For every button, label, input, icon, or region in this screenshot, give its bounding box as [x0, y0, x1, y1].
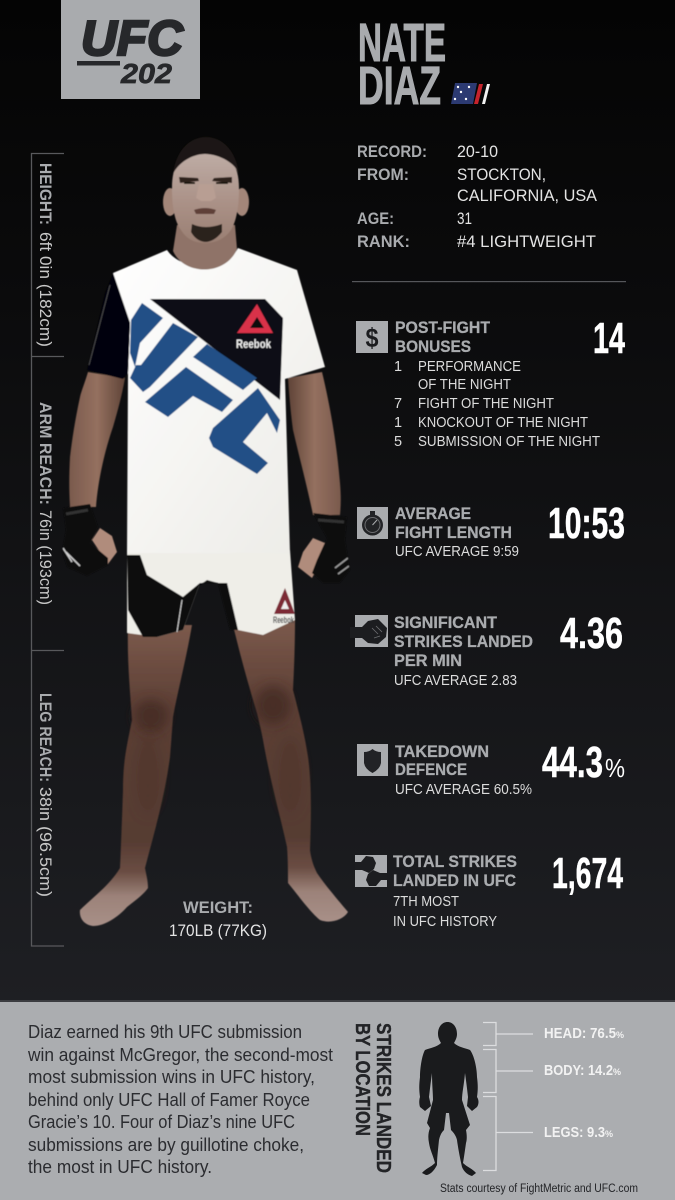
body brackets [483, 1022, 533, 1170]
heading: strikes landed by location: STRIKES LANDED [372, 1023, 394, 1173]
logo: UFC 202: UFC [81, 12, 184, 66]
icon: two fists [355, 855, 387, 887]
panel: post-fight bonuses: PERFORMANCE [418, 359, 521, 375]
fighter details: CALIFORNIA, USA [457, 186, 598, 205]
panel: post-fight bonuses: 7 [394, 396, 402, 412]
fighter details: RECORD: [357, 142, 427, 161]
leg reach label: LEG REACH: [36, 693, 55, 782]
shirt [87, 248, 325, 553]
panel: total strikes [355, 849, 623, 930]
fighter details: STOCKTON, [457, 165, 546, 184]
panel: total strikes: IN UFC HISTORY [393, 914, 497, 930]
label: legs: % [605, 1129, 613, 1139]
panel: significant strikes: 4.36 [560, 609, 623, 658]
panel: total strikes: 7TH MOST [393, 894, 459, 910]
icon: body silhouette [419, 1022, 478, 1176]
panel: average fight length: 10:53 [548, 499, 625, 548]
reebok chest logo: Reebok [236, 339, 272, 351]
panel: post-fight bonuses: FIGHT OF THE NIGHT [418, 396, 554, 412]
fighter details: 31 [457, 209, 472, 228]
text block: submission note: Diaz earned his 9th UFC submission [28, 1022, 302, 1042]
logo: UFC 202: 202 [120, 58, 172, 89]
leg reach label: 38in (96.5cm) [36, 787, 55, 897]
head [163, 137, 249, 270]
panel: takedown defence: DEFENCE [395, 760, 467, 779]
arms [69, 372, 341, 515]
panel: takedown defence: TAKEDOWN [395, 742, 489, 761]
fighter details: RANK: [357, 232, 410, 251]
panel: post-fight bonuses: BONUSES [395, 337, 471, 356]
text block: submission note: the most in UFC history. [28, 1157, 212, 1177]
black left sleeve [87, 273, 130, 379]
label: head: % [616, 1030, 624, 1040]
fighter details: 20-10 [457, 142, 498, 161]
fighter details: #4 LIGHTWEIGHT [457, 232, 596, 251]
panel: average fight length: FIGHT LENGTH [395, 523, 512, 542]
panel: average fight length [357, 499, 625, 560]
panel: post-fight bonuses: 14 [593, 314, 625, 363]
panel: average fight length: AVERAGE [395, 504, 471, 523]
panel: post-fight bonuses: OF THE NIGHT [418, 377, 511, 393]
arm reach label [36, 402, 55, 605]
fighter figure [62, 137, 350, 926]
panel: post-fight bonuses: SUBMISSION OF THE NIGHT [418, 434, 600, 450]
arm reach label: ARM REACH: [36, 402, 55, 505]
shorts: Reebok [273, 615, 295, 625]
icon: shield [357, 744, 388, 776]
panel: takedown defence: 44.3 [542, 738, 603, 787]
icon: dollar [356, 321, 388, 353]
icon: flag [451, 83, 490, 104]
source credit: Stats courtesy of FightMetric and UFC.com [440, 1183, 638, 1195]
icon: dollar: $ [366, 323, 378, 353]
panel: post-fight bonuses: 1 [394, 415, 402, 431]
panel: significant strikes: SIGNIFICANT [394, 613, 498, 632]
text block: submission note: behind only UFC Hall of Famer Royce [28, 1090, 310, 1110]
text block: submission note [27, 1022, 333, 1177]
text block: submission note: Gracie’s 10. Four of Diaz’s nine UFC [28, 1112, 295, 1132]
panel: takedown defence [357, 738, 625, 798]
fighter details [357, 142, 598, 251]
panel: significant strikes: UFC AVERAGE 2.83 [394, 673, 517, 689]
label: legs: LEGS: 9.3 [544, 1124, 605, 1141]
leg reach label [36, 693, 55, 897]
reebok chest logo [236, 304, 273, 351]
gloves and fists [62, 504, 350, 583]
panel: post-fight bonuses: 1 [394, 359, 402, 375]
panel: post-fight bonuses: 5 [394, 434, 402, 450]
panel: significant strikes: STRIKES LANDED [394, 632, 533, 651]
logo: UFC 202 [61, 0, 200, 99]
arm reach label: 76in (193cm) [36, 510, 55, 605]
height label: 6ft 0in (182cm) [36, 232, 55, 347]
panel: takedown defence: UFC AVERAGE 60.5% [395, 782, 532, 798]
fighter name [358, 13, 446, 116]
height label [36, 163, 55, 347]
panel: total strikes: 1,674 [552, 849, 623, 898]
measurement ruler [31, 154, 64, 946]
panel: total strikes: TOTAL STRIKES [393, 852, 517, 871]
weight label: WEIGHT: [183, 898, 253, 917]
label: head: HEAD: 76.5 [544, 1025, 616, 1042]
UFC jersey letters [130, 303, 280, 474]
icon: stopwatch [357, 507, 388, 539]
heading: strikes landed by location [351, 1023, 394, 1173]
label: body: % [613, 1067, 621, 1077]
weight label [169, 898, 267, 940]
legs [80, 620, 348, 926]
fighter details: FROM: [357, 165, 409, 184]
black chest panel [150, 299, 283, 400]
text block: submission note: submissions are by guillotine choke, [28, 1135, 304, 1155]
text block: submission note: win against McGregor, the second-most [27, 1045, 333, 1065]
fighter name: DIAZ [358, 56, 441, 116]
panel: average fight length: UFC AVERAGE 9:59 [395, 544, 519, 560]
icon: fist [350, 615, 388, 647]
panel: significant strikes: PER MIN [394, 651, 462, 670]
weight label: 170LB (77KG) [169, 921, 267, 940]
panel: post-fight bonuses: POST-FIGHT [395, 318, 491, 337]
shorts [127, 550, 295, 637]
text block: submission note: most submission wins in UFC history, [28, 1067, 315, 1087]
fighter details: AGE: [357, 209, 394, 228]
panel: bottom strip [0, 1000, 675, 1200]
heading: strikes landed by location: BY LOCATION [351, 1023, 373, 1136]
panel: post-fight bonuses [356, 314, 625, 450]
height label: HEIGHT: [36, 163, 55, 225]
panel: post-fight bonuses: KNOCKOUT OF THE NIGHT [418, 415, 588, 431]
fighter name: NATE [358, 13, 446, 73]
panel: significant strikes [350, 609, 623, 689]
panel: total strikes: LANDED IN UFC [393, 871, 516, 890]
label: body: BODY: 14.2 [544, 1062, 613, 1079]
panel: takedown defence: % [605, 753, 625, 783]
